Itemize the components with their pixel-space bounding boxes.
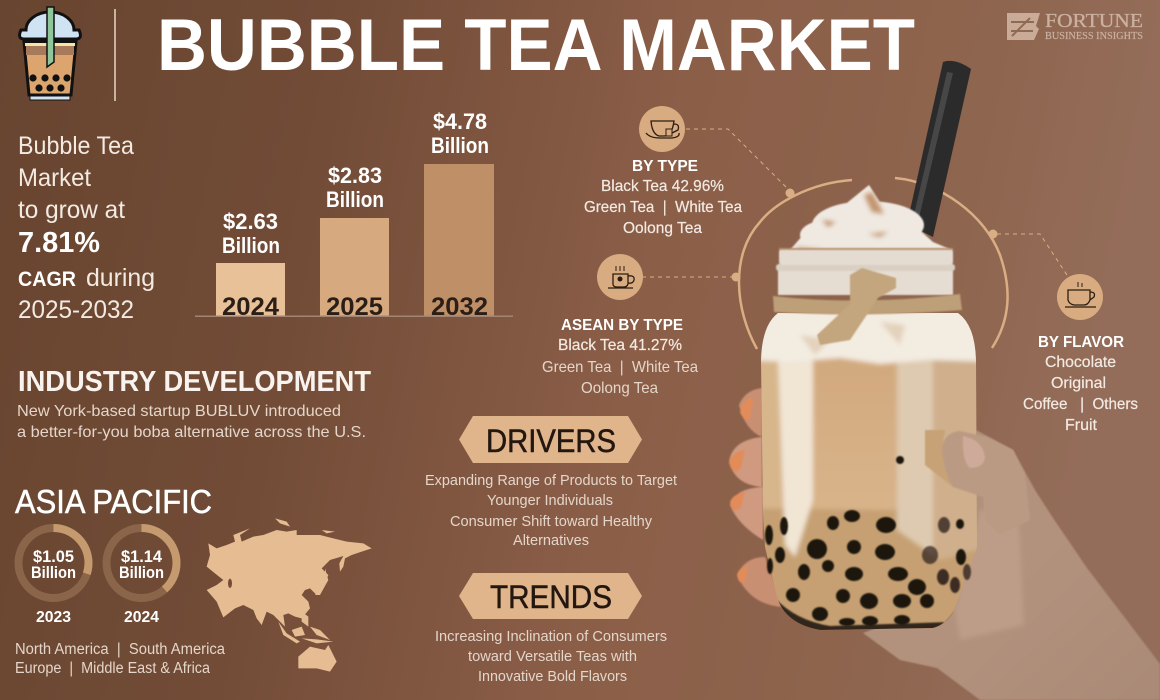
by type text: Black Tea 42.96% (601, 178, 724, 195)
title: BUBBLE TEA MARKET (157, 5, 915, 86)
by flavor text: Fruit (1065, 417, 1098, 434)
icon: tea cup by type (639, 106, 685, 152)
cinnamon dusting (795, 192, 888, 250)
drivers text: Younger Individuals (487, 492, 613, 509)
foam (790, 185, 952, 250)
bar chart: $2.83 (328, 163, 382, 188)
by flavor text: Chocolate (1045, 354, 1116, 371)
by type text: Green Tea | White Tea (584, 199, 742, 216)
industry development (17, 366, 371, 441)
hand behind jar (729, 388, 1160, 700)
trends text: Innovative Bold Flavors (478, 668, 627, 685)
donut 2023: Billion (31, 563, 76, 582)
by type text (584, 158, 742, 237)
asean by type text (542, 317, 698, 397)
other regions: North America | South America (15, 641, 225, 658)
twine (773, 268, 962, 345)
donut 2024 (106, 528, 176, 626)
connector lines and arcs (642, 129, 1067, 349)
other regions (15, 641, 225, 677)
drivers badge: DRIVERS (486, 423, 616, 459)
drivers badge (459, 416, 642, 463)
donut 2023: 2023 (36, 609, 71, 626)
title divider (114, 9, 116, 101)
icon: bubble tea cup (20, 7, 80, 100)
asean by type text: ASEAN BY TYPE (561, 317, 683, 334)
industry development: INDUSTRY DEVELOPMENT (18, 366, 371, 398)
bar chart: 2024 (222, 293, 279, 321)
icon: tea cup asean (597, 254, 643, 300)
icon: coffee cup by flavor (1057, 274, 1103, 320)
other regions: Europe | Middle East & Africa (15, 660, 210, 677)
by type text: BY TYPE (632, 158, 698, 175)
wrist highlight (955, 505, 1024, 640)
growth statement: CAGR (18, 268, 76, 291)
donut 2023: $1.05 (33, 547, 74, 566)
by flavor text (1023, 334, 1138, 434)
industry development: a better-for-you boba alternative across the U.S. (17, 424, 366, 441)
drivers text: Consumer Shift toward Healthy (450, 513, 652, 530)
drivers text: Alternatives (513, 532, 589, 549)
photo: hand holding bubble tea jar (729, 61, 1160, 700)
drivers text (425, 472, 678, 549)
growth statement: 7.81% (18, 227, 100, 259)
bar chart: $4.78 (433, 109, 487, 134)
asean by type text: Oolong Tea (581, 380, 658, 397)
growth statement: to grow at (18, 196, 125, 224)
neck and rim (776, 248, 955, 295)
drivers text: Expanding Range of Products to Target (425, 472, 678, 489)
bar chart: 2032 (431, 293, 488, 321)
trends text: toward Versatile Teas with (468, 648, 637, 665)
trends text: Increasing Inclination of Consumers (435, 628, 667, 645)
bar chart (195, 109, 513, 321)
logo: Fortune Business Insights (1007, 10, 1143, 42)
donut 2024: 2024 (124, 609, 159, 626)
by flavor text: Original (1051, 375, 1106, 392)
growth statement (18, 132, 155, 324)
growth statement: 2025-2032 (18, 296, 134, 324)
donut 2024: Billion (119, 563, 164, 582)
growth statement: during (86, 264, 155, 292)
jar body (761, 247, 977, 630)
donut 2023 (18, 528, 88, 626)
map: Asia Pacific (207, 518, 372, 672)
by flavor text: BY FLAVOR (1038, 334, 1124, 351)
by type text: Oolong Tea (623, 220, 702, 237)
bar chart: Billion (431, 133, 489, 158)
bar chart: Billion (222, 233, 280, 258)
trends text (435, 628, 667, 685)
donut 2024: $1.14 (121, 547, 163, 566)
asean by type text: Green Tea | White Tea (542, 359, 698, 376)
bar chart: Billion (326, 187, 384, 212)
thumb (925, 430, 1030, 535)
trends badge: TRENDS (490, 579, 612, 615)
asia pacific heading: ASIA PACIFIC (15, 483, 212, 520)
straw (907, 61, 971, 237)
bar chart: 2025 (326, 293, 383, 321)
by flavor text: Coffee | Others (1023, 396, 1138, 413)
logo: Fortune Business Insights: FORTUNE (1045, 10, 1143, 32)
industry development: New York-based startup BUBLUV introduced (17, 403, 341, 420)
growth statement: Bubble Tea (18, 132, 134, 160)
bar chart: $2.63 (223, 209, 278, 234)
boba pearls (765, 456, 971, 626)
asean by type text: Black Tea 41.27% (558, 337, 682, 354)
logo: Fortune Business Insights: BUSINESS INSIGHTS (1045, 31, 1143, 42)
trends badge (459, 573, 642, 619)
growth statement: Market (18, 164, 91, 192)
